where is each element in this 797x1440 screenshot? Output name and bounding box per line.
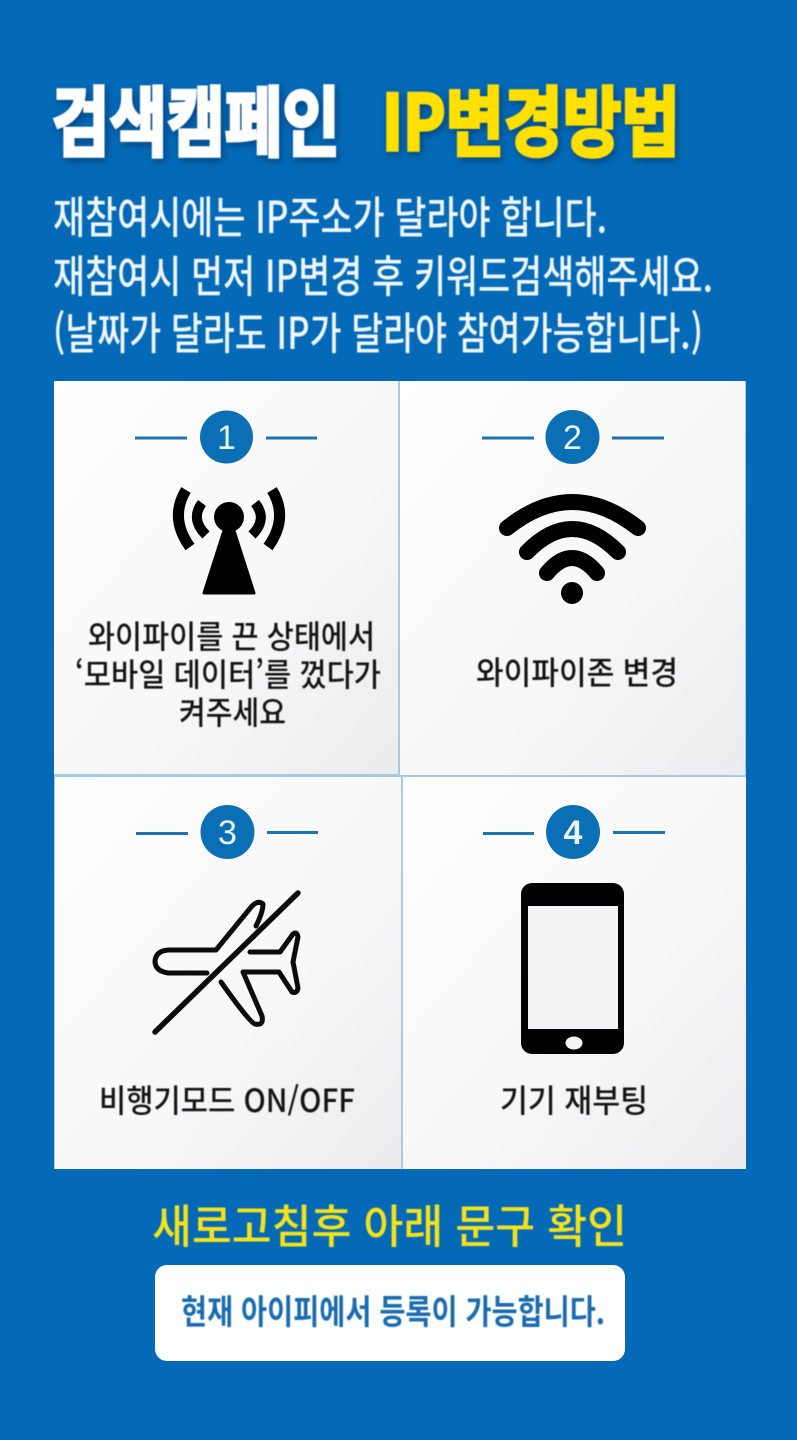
icon: wifi: [507, 502, 638, 604]
step number 3: [136, 805, 318, 859]
instruction heading: 새로고침후 아래 문구 확인: [152, 1191, 627, 1257]
label 2: 와이파이존 변경: [476, 648, 678, 694]
title: [52, 62, 680, 172]
panel 3: airplane mode: [55, 777, 401, 1169]
label 1: 와이파이를 끈 상태에서: [88, 612, 375, 658]
step number 4: [483, 805, 665, 859]
panel 2: wifi zone: [400, 381, 745, 775]
title: 검색캠페인: [52, 62, 340, 172]
title: IP변경방법: [382, 62, 680, 172]
step number 2: [482, 410, 664, 464]
icon: smartphone: [521, 883, 624, 1054]
step number 3: 3: [218, 814, 237, 852]
icon: airplane off: [155, 893, 298, 1032]
message text: 현재 아이피에서 등록이 가능합니다.: [181, 1285, 605, 1334]
icon: antenna: [178, 490, 280, 593]
label 1: ‘모바일 데이터’를 껐다가: [75, 650, 381, 696]
step number 1: 1: [217, 419, 236, 457]
step number 4: 4: [564, 814, 583, 852]
label 4: 기기 재부팅: [500, 1076, 648, 1122]
step number 1: [135, 410, 317, 464]
label 3: 비행기모드 ON/OFF: [99, 1076, 355, 1122]
intro text: [53, 182, 713, 362]
panel 1: mobile data: [54, 381, 398, 774]
label 1: [75, 612, 381, 734]
label 1: 켜주세요: [179, 688, 286, 734]
panel 4: reboot device: [403, 777, 746, 1169]
message box: [155, 1265, 625, 1361]
step number 2: 2: [563, 419, 582, 457]
intro text: 재참여시에는 IP주소가 달라야 합니다.: [53, 182, 607, 246]
